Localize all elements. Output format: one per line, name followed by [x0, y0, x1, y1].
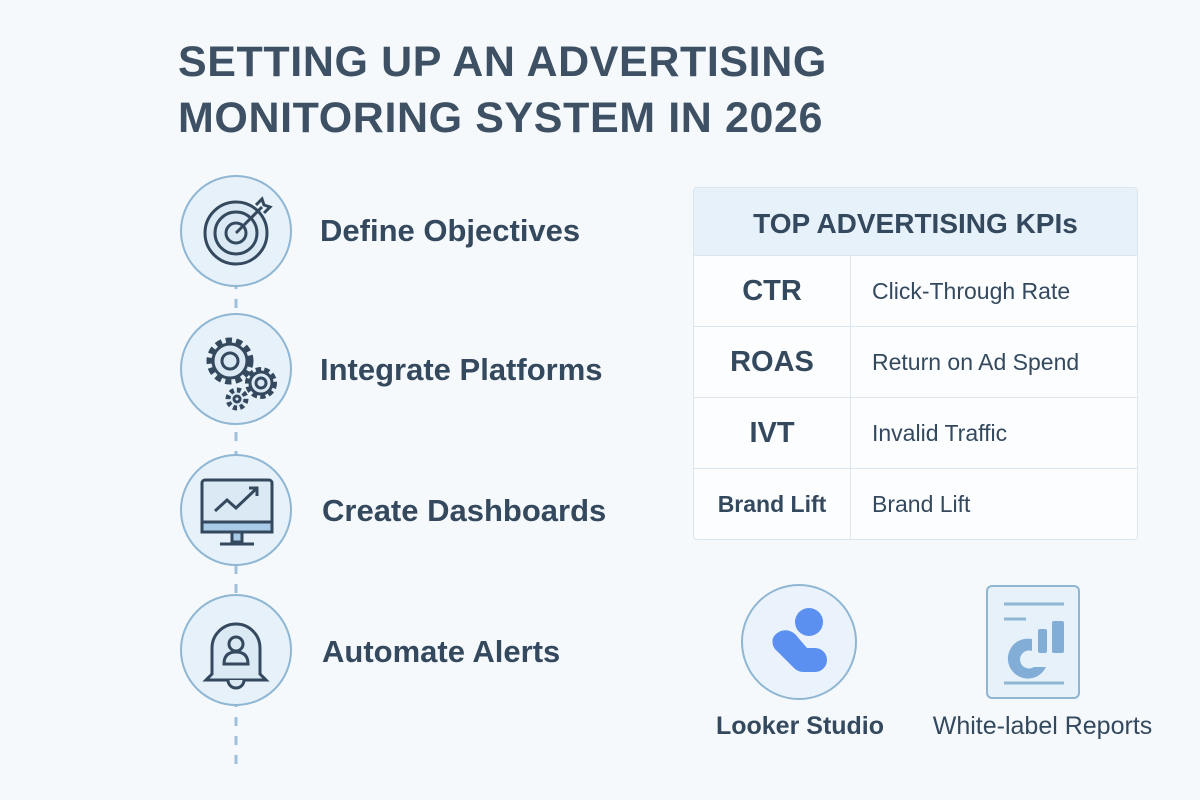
- KPI rows: ROAS: [730, 346, 814, 378]
- table heading: TOP ADVERTISING KPIs: [753, 208, 1078, 239]
- KPI rows: Brand Lift: [718, 491, 826, 517]
- step 2: integrate platforms: [180, 313, 603, 425]
- label: White-label Reports: [933, 712, 1152, 740]
- label: Integrate Platforms: [320, 352, 603, 387]
- dashed connector line: [234, 286, 238, 764]
- icon: gears: [180, 313, 292, 425]
- label: Create Dashboards: [322, 493, 606, 528]
- tool: White-label Reports: [932, 585, 1152, 740]
- title: SETTING UP AN ADVERTISING: [178, 38, 827, 86]
- step 3: create dashboards: [180, 454, 606, 566]
- table heading: [694, 188, 1137, 255]
- icon: target: [180, 175, 292, 287]
- KPI rows: [694, 255, 1137, 539]
- KPI rows: IVT: [749, 416, 795, 448]
- icon: report doc: [986, 585, 1080, 699]
- label: Define Objectives: [320, 213, 580, 248]
- KPI rows: Click-Through Rate: [872, 278, 1070, 304]
- label: Automate Alerts: [322, 634, 560, 669]
- tool: Looker Studio: [716, 584, 884, 740]
- icon: bell: [180, 594, 292, 706]
- step 1: define objectives: [180, 175, 580, 287]
- KPI rows: Return on Ad Spend: [872, 348, 1079, 374]
- title: [178, 38, 827, 142]
- KPI rows: Brand Lift: [872, 491, 970, 517]
- icon: monitor chart: [180, 454, 292, 566]
- title: MONITORING SYSTEM IN 2026: [178, 94, 823, 142]
- KPI rows: Invalid Traffic: [872, 420, 1007, 446]
- icon: looker: [741, 584, 857, 700]
- label: Looker Studio: [716, 712, 884, 740]
- panel: KPI table: [693, 187, 1138, 540]
- KPI rows: CTR: [742, 274, 802, 306]
- step 4: automate alerts: [180, 594, 560, 706]
